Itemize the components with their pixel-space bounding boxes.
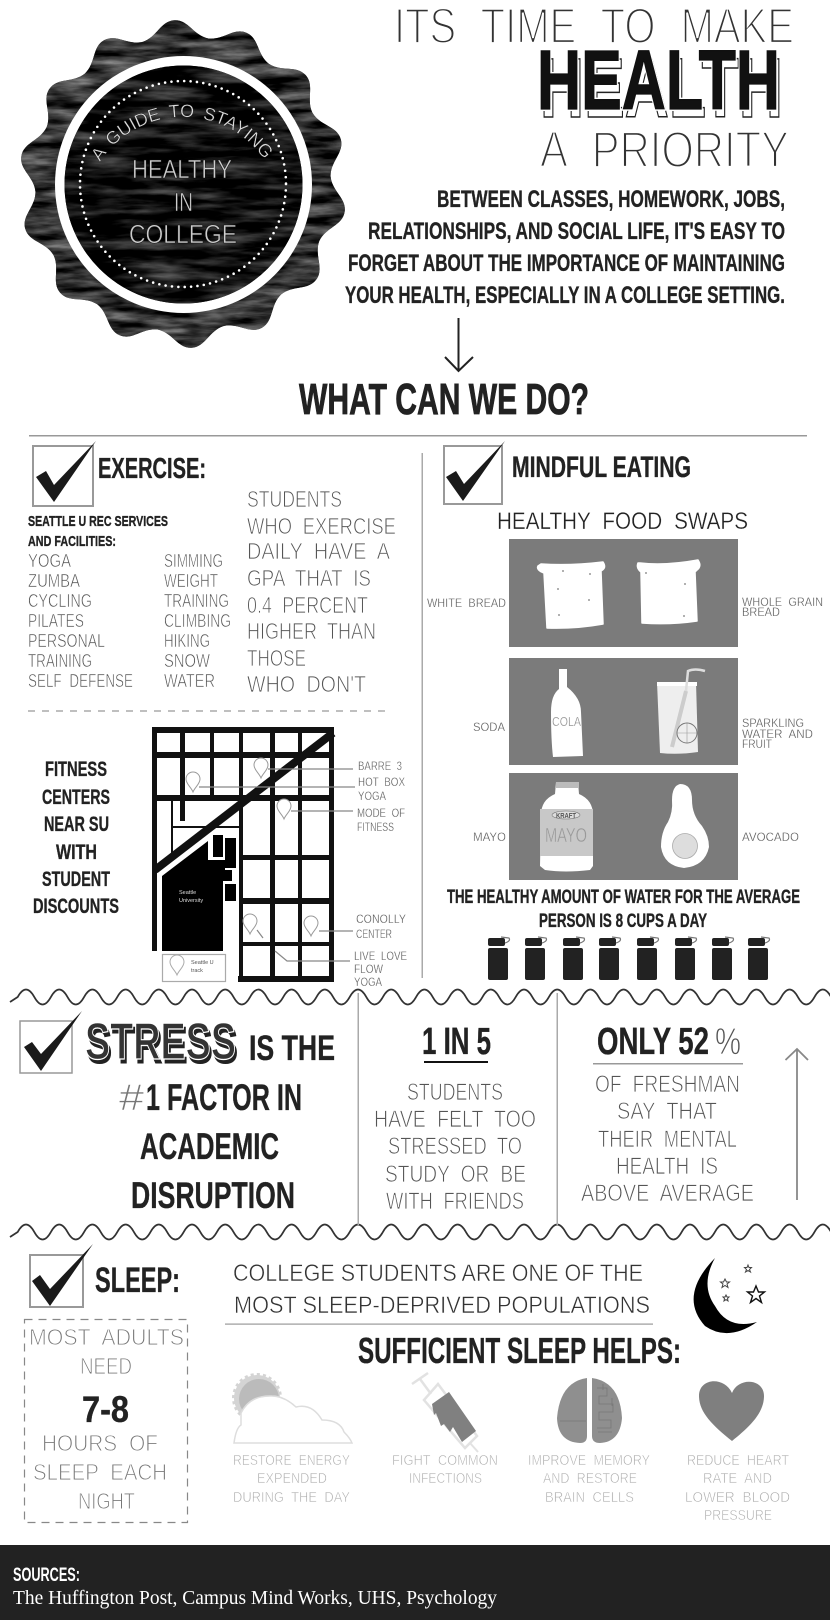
stress statement: # [119, 1077, 145, 1118]
GPA statistic: DAILY HAVE A [247, 538, 391, 564]
restore energy text: EXPENDED [257, 1470, 327, 1487]
statistic description: STUDENTS [407, 1079, 503, 1106]
sleep heading: SLEEP: [95, 1261, 180, 1300]
GPA statistic: HIGHER THAN [247, 618, 376, 644]
fitness centers heading: CENTERS [42, 786, 110, 809]
fitness centers heading: NEAR SU [44, 813, 109, 836]
services list column 1 [28, 551, 133, 691]
icon: mayo jar: KRAFT [556, 813, 577, 820]
swap labels right: SPARKLING [742, 716, 804, 730]
arrow down [445, 318, 473, 371]
services list column 1: CYCLING [28, 591, 92, 611]
icon: eight water bottles [488, 937, 770, 980]
swap labels left: WHITE BREAD [427, 596, 506, 610]
swap labels left: MAYO [473, 830, 506, 844]
statistic description: STRESSED TO [388, 1133, 522, 1160]
statistic: only 52 percent: ONLY 52 [597, 1021, 709, 1063]
GPA statistic [247, 486, 396, 697]
map: location labels: BARRE 3 [358, 759, 402, 773]
map: campus: Seattle [179, 890, 196, 896]
sleep deprivation statement [233, 1260, 650, 1319]
statistic description: WITH FRIENDS [386, 1188, 524, 1215]
improve memory text: IMPROVE MEMORY [528, 1452, 650, 1469]
map: location labels: YOGA [354, 975, 382, 989]
rec services heading: AND FACILITIES: [28, 533, 116, 550]
icon: stress checkbox [20, 1011, 82, 1073]
fitness centers heading [33, 758, 119, 918]
fitness centers heading: WITH [56, 841, 97, 864]
statistic description: SAY THAT [617, 1098, 717, 1125]
map: campus [162, 835, 236, 951]
improve memory text: BRAIN CELLS [545, 1489, 634, 1506]
improve memory text: AND RESTORE [543, 1470, 637, 1487]
stress statement: DISRUPTION [131, 1175, 295, 1216]
statistic description: THEIR MENTAL [598, 1126, 737, 1153]
swap labels right: WATER AND [742, 727, 813, 741]
heading: what can we do: WHAT CAN WE DO? [299, 375, 589, 424]
icon: whole grain bread [637, 560, 700, 624]
services list column 1: PILATES [28, 611, 84, 631]
stress heading word: STRESS [85, 1013, 236, 1071]
map: pins [186, 758, 318, 936]
sleep hours callout: MOST ADULTS [29, 1324, 184, 1350]
map: location labels: CONOLLY [356, 912, 406, 926]
fitness centers heading: STUDENT [42, 868, 110, 891]
services list column 2: HIKING [164, 631, 210, 651]
food swaps heading: HEALTHY FOOD SWAPS [497, 508, 748, 535]
water statement: PERSON IS 8 CUPS A DAY [539, 911, 707, 932]
map: location labels: MODE OF [357, 806, 405, 820]
benefit: improve memory [528, 1378, 650, 1506]
stress statement: ACADEMIC [140, 1126, 279, 1167]
badge curved text: A GUIDE TO STAYING [92, 104, 272, 162]
map: location labels: LIVE LOVE [354, 949, 407, 963]
statistic description: OF FRESHMAN [595, 1071, 740, 1098]
map: location labels: CENTER [356, 927, 392, 941]
icon: syringe [412, 1373, 478, 1452]
swap labels right: FRUIT [742, 737, 773, 751]
sufficient sleep heading: SUFFICIENT SLEEP HELPS: [358, 1330, 681, 1371]
icon: exercise checkbox [33, 441, 96, 506]
icon: sparkling water [657, 670, 705, 754]
statistic description [581, 1071, 754, 1207]
GPA statistic: WHO DON'T [247, 671, 366, 697]
badge dark center [60, 60, 308, 310]
icon: mayo jar [540, 782, 593, 872]
swap panel: drinks [509, 658, 738, 765]
map: campus legend box: Seattle U [191, 960, 214, 966]
swap labels right [742, 595, 823, 844]
GPA statistic: THOSE [247, 645, 306, 671]
map: location labels: FITNESS [357, 820, 394, 834]
badge main text: COLLEGE [129, 219, 237, 249]
services list column 1: SELF DEFENSE [28, 671, 133, 691]
panel: 1 in 5 [374, 1021, 536, 1215]
sleep hours callout: NEED [80, 1353, 132, 1379]
badge white ring [55, 56, 312, 313]
GPA statistic: WHO EXERCISE [247, 513, 396, 539]
icon: soda bottle: COLA [552, 714, 581, 729]
water statement [447, 887, 800, 932]
badge: a guide to staying healthy in college [21, 20, 345, 348]
icon: sun and cloud [234, 1375, 352, 1443]
services list column 1: YOGA [28, 551, 71, 571]
swap labels left [427, 596, 506, 844]
footer: sources [0, 1545, 830, 1620]
icon: avocado [661, 784, 709, 868]
arrow up [786, 1049, 808, 1200]
fight infections text: FIGHT COMMON [392, 1452, 498, 1469]
reduce heart rate text: REDUCE HEART [687, 1452, 789, 1469]
stress statement: IS THE [249, 1029, 335, 1068]
sleep hours callout: SLEEP EACH [33, 1459, 167, 1485]
panel: exercise [28, 441, 407, 989]
benefit: restore energy [233, 1375, 352, 1506]
swap panel: bread [509, 539, 738, 647]
statistic description: HAVE FELT TOO [374, 1106, 536, 1133]
sources list: The Huffington Post, Campus Mind Works, UHS, Psychology [13, 1587, 497, 1609]
map: leader lines [199, 769, 355, 961]
reduce heart rate text: RATE AND [703, 1470, 772, 1487]
services list column 2: CLIMBING [164, 611, 231, 631]
map: campus legend box [162, 954, 226, 982]
services list column 2: SIMMING [164, 551, 223, 571]
services list column 1: ZUMBA [28, 571, 80, 591]
sources heading: SOURCES: [13, 1565, 80, 1586]
panel: stress [20, 1011, 335, 1216]
panel: only 52 percent [581, 1021, 808, 1207]
services list column 2 [164, 551, 231, 691]
reduce heart rate text [685, 1452, 790, 1524]
icon: heart [699, 1381, 764, 1441]
map: location labels: FLOW [354, 962, 384, 976]
icon: soda bottle [551, 669, 583, 757]
services list column 1: PERSONAL [28, 631, 105, 651]
stress statement: 1 FACTOR IN [146, 1077, 302, 1118]
icon: sleep checkbox [30, 1244, 93, 1307]
services list column 2: WATER [164, 671, 215, 691]
services list column 1: TRAINING [28, 651, 92, 671]
stress heading word [85, 1013, 238, 1075]
swap labels right: WHOLE GRAIN [742, 595, 823, 609]
fitness centers heading: FITNESS [45, 758, 107, 781]
icon: brain [557, 1378, 622, 1443]
sleep hours callout: 7-8 [82, 1389, 129, 1430]
map: location labels: HOT BOX [358, 775, 405, 789]
badge main text: HEALTHY [132, 154, 232, 184]
sleep hours callout: HOURS OF [42, 1430, 158, 1456]
mindful eating heading: MINDFUL EATING [512, 451, 691, 484]
badge main text [129, 154, 237, 249]
panel: mindful eating [427, 441, 823, 980]
map: campus: University [179, 898, 203, 904]
statistic description [374, 1079, 536, 1215]
services list column 2: TRAINING [164, 591, 229, 611]
panel: sleep [24, 1244, 790, 1524]
rec services heading: SEATTLE U REC SERVICES [28, 513, 168, 530]
reduce heart rate text: PRESSURE [704, 1507, 772, 1524]
intro paragraph [345, 186, 785, 309]
swap labels right: AVOCADO [742, 830, 799, 844]
restore energy text: RESTORE ENERGY [233, 1452, 350, 1469]
sleep hours callout [24, 1320, 188, 1522]
sleep deprivation statement: MOST SLEEP-DEPRIVED POPULATIONS [234, 1292, 650, 1319]
stress statement [119, 1029, 335, 1216]
restore energy text [233, 1452, 350, 1506]
rec services heading [28, 513, 168, 550]
sleep deprivation statement: COLLEGE STUDENTS ARE ONE OF THE [233, 1260, 643, 1287]
restore energy text: DURING THE DAY [233, 1489, 350, 1506]
swap labels right: BREAD [742, 605, 780, 619]
GPA statistic: GPA THAT IS [247, 565, 371, 591]
improve memory text [528, 1452, 650, 1506]
fitness centers heading: DISCOUNTS [33, 895, 119, 918]
GPA statistic: 0.4 PERCENT [247, 592, 368, 618]
statistic: 1 in 5: 1 IN 5 [422, 1021, 491, 1063]
title [394, 0, 794, 178]
map: campus legend box: track [191, 968, 203, 974]
map: location labels: YOGA [358, 789, 386, 803]
benefit: fight infections [392, 1373, 498, 1487]
map of fitness centers [152, 727, 407, 989]
icon: white bread [538, 562, 605, 628]
swap panel: spreads [509, 773, 738, 880]
badge scalloped textured outer [15, 15, 350, 355]
sleep hours callout: NIGHT [78, 1488, 135, 1514]
icon: mindful eating checkbox [444, 441, 505, 504]
badge main text: IN [174, 187, 193, 217]
statistic description: ABOVE AVERAGE [581, 1180, 754, 1207]
GPA statistic: STUDENTS [247, 486, 342, 512]
benefit: reduce heart rate [685, 1381, 790, 1524]
map: location labels [354, 759, 407, 989]
statistic description: HEALTH IS [616, 1153, 718, 1180]
reduce heart rate text: LOWER BLOOD [685, 1489, 790, 1506]
fight infections text [392, 1452, 498, 1487]
icon: mayo jar: MAYO [545, 825, 587, 847]
badge dotted ring [80, 81, 286, 287]
stress heading word: STRESS [87, 1017, 238, 1075]
swap labels left: SODA [473, 720, 505, 734]
statistic: only 52 percent: % [715, 1021, 741, 1063]
services list column 2: WEIGHT [164, 571, 218, 591]
exercise heading: EXERCISE: [98, 453, 206, 485]
services list column 2: SNOW [164, 651, 210, 671]
statistic description: STUDY OR BE [385, 1161, 526, 1188]
icon: moon and stars [694, 1258, 764, 1333]
fight infections text: INFECTIONS [409, 1470, 482, 1487]
